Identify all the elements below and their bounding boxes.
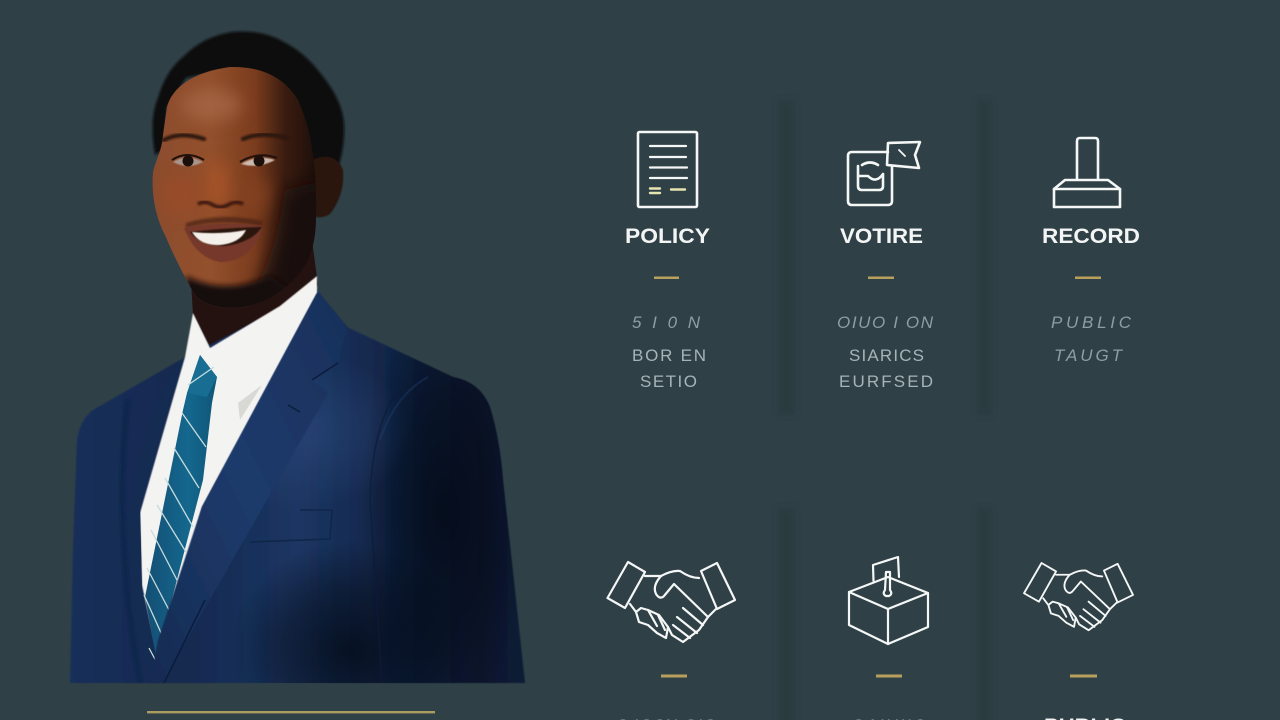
forehead highlight — [182, 89, 242, 121]
neck — [190, 240, 318, 350]
panel: ballot box — [849, 557, 928, 720]
icon: handshake — [1024, 563, 1133, 630]
nostrils — [198, 202, 243, 207]
icon: stamp — [1054, 138, 1120, 207]
suit jacket — [70, 290, 525, 683]
text lines: PUBLIC — [1051, 313, 1132, 332]
text lines: EURFSED — [839, 372, 933, 391]
panel: voting — [837, 142, 934, 391]
gold rule under portrait — [147, 711, 435, 713]
gold dash — [654, 276, 679, 279]
text lines — [632, 313, 706, 391]
right ear — [312, 157, 343, 217]
right lapel — [150, 293, 347, 683]
nose highlight — [206, 161, 230, 209]
gold dash — [868, 276, 894, 279]
icon: ballot card with flag — [848, 142, 920, 205]
face — [152, 67, 316, 308]
shirt fold — [238, 385, 262, 420]
chin beard — [184, 274, 281, 308]
teeth — [192, 230, 246, 245]
breast pocket — [250, 510, 332, 542]
text lines: 5 I 0 N — [632, 313, 701, 332]
white shirt — [140, 276, 317, 660]
panel: handshake left — [608, 562, 735, 720]
panel: record — [1042, 138, 1140, 365]
gold dash — [876, 674, 902, 678]
gold dash — [661, 674, 687, 678]
icon: ballot box — [849, 557, 928, 644]
left lapel — [127, 360, 180, 683]
panel: handshake right — [1024, 563, 1133, 720]
gold dash — [1070, 674, 1097, 678]
hair — [153, 31, 344, 195]
gold dash — [1075, 276, 1101, 279]
text lines: SIARICS — [849, 346, 924, 365]
jacket shading — [120, 358, 509, 683]
striped tie — [144, 355, 217, 663]
eyes — [173, 158, 203, 166]
portrait of man in navy suit — [70, 31, 530, 720]
jaw shadow — [248, 179, 316, 306]
column dividers — [778, 100, 992, 720]
moustache shadow — [186, 217, 262, 228]
icon: handshake — [608, 562, 735, 642]
text lines: TAUGT — [1054, 346, 1124, 365]
cheek warmth — [171, 185, 184, 204]
lips — [184, 223, 263, 262]
heading: RECORD — [1042, 225, 1140, 248]
heading: VOTIRE — [840, 225, 923, 248]
text lines: SETIO — [640, 372, 697, 391]
eyebrows — [164, 135, 287, 140]
mouth interior — [190, 227, 262, 246]
icon: document — [638, 132, 697, 207]
heading: POLICY — [625, 225, 710, 248]
lapel notch and buttonhole — [164, 363, 338, 683]
text lines — [1051, 313, 1132, 365]
panel: policy — [625, 132, 710, 391]
text lines: BOR EN — [632, 346, 706, 365]
text lines — [837, 313, 934, 391]
text lines: OIUO I ON — [837, 313, 934, 332]
